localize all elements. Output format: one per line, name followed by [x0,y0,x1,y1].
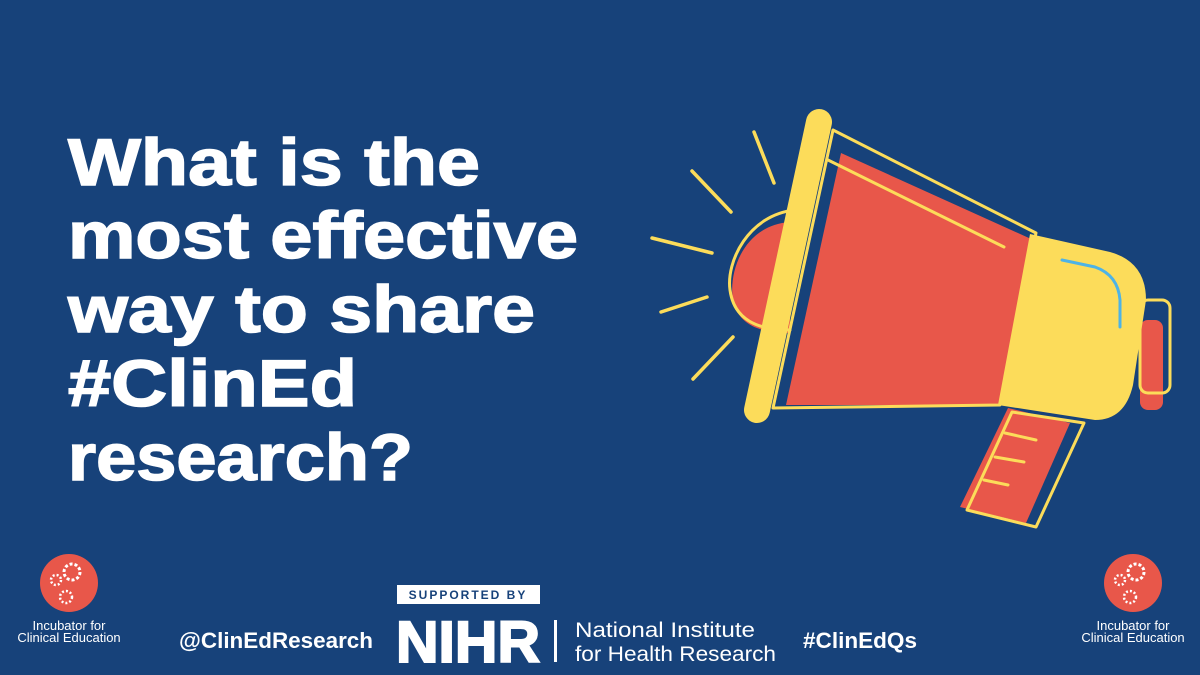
logo: NIHR: NIHR [396,610,540,675]
title [67,125,578,494]
logo: NIHR [396,585,776,675]
body [998,234,1146,420]
logo: left incubator: Incubator for [32,618,106,633]
title: most effective [68,198,578,272]
title: way to share [67,272,535,346]
logo: NIHR: National Institute [575,619,755,642]
logo: right incubator: Clinical Education [1081,630,1185,645]
logo: NIHR: SUPPORTED BY [409,588,527,602]
title: #ClinEd [68,346,357,420]
cone [786,153,1040,405]
handle: @ClinEdResearch: @ClinEdResearch [179,628,373,653]
title: research? [68,420,413,494]
sound rays [652,132,774,379]
title: What is the [68,125,480,199]
icon: megaphone [652,122,1170,527]
logo: left incubator: Clinical Education [17,630,121,645]
logo: left incubator [17,554,121,645]
hashtag: #ClinEdQs [803,628,917,653]
logo: right incubator [1081,554,1185,645]
logo: right incubator: Incubator for [1096,618,1170,633]
rim [757,122,819,410]
handle [960,408,1070,523]
logo: NIHR: for Health Research [575,643,776,666]
back red rect [1140,320,1163,410]
back dome [732,222,790,333]
